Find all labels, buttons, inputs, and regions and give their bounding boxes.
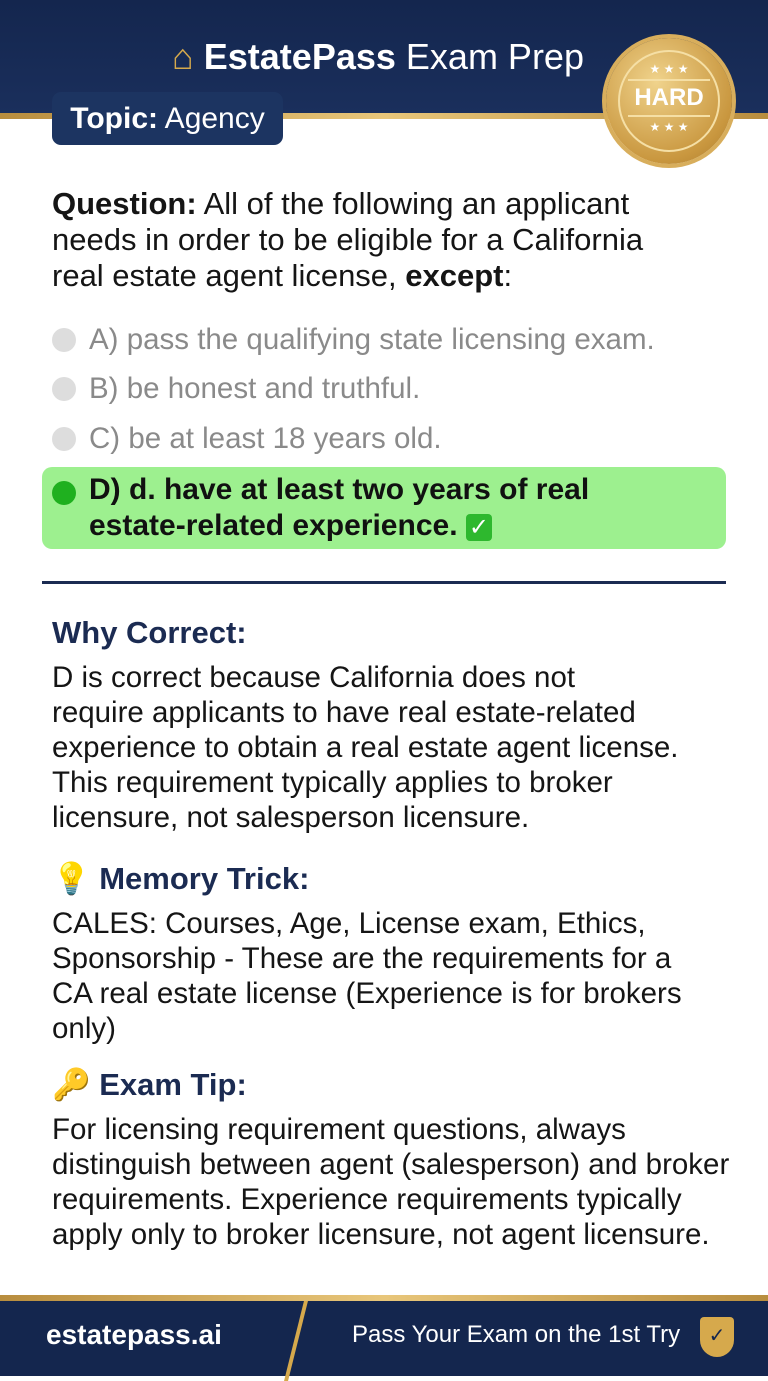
option B: B) be honest and truthful. xyxy=(89,372,420,405)
badge: HARD xyxy=(606,38,732,164)
why correct: Why Correct: xyxy=(52,615,247,650)
question: real estate agent license, except: xyxy=(52,258,512,293)
footer xyxy=(0,1295,768,1376)
memory trick: CALES: Courses, Age, License exam, Ethics, xyxy=(52,907,646,940)
why correct: licensure, not salesperson licensure. xyxy=(52,801,529,834)
footer: Pass Your Exam on the 1st Try xyxy=(352,1321,680,1348)
exam tip: apply only to broker licensure, not agent licensure. xyxy=(52,1218,710,1251)
title: ⌂ EstatePass Exam Prep xyxy=(172,36,584,77)
memory trick: Sponsorship - These are the requirements for a xyxy=(52,942,671,975)
exam tip: 🔑 Exam Tip: xyxy=(52,1067,247,1102)
memory trick: 💡 Memory Trick: xyxy=(52,861,309,896)
footer: estatepass.ai xyxy=(46,1319,222,1350)
option D correct: estate-related experience. ✓ xyxy=(89,509,489,542)
memory trick: only) xyxy=(52,1012,116,1045)
exam tip xyxy=(52,1067,729,1251)
header band xyxy=(0,0,768,113)
memory trick xyxy=(52,861,682,1045)
question: Question: All of the following an applicant xyxy=(52,186,629,221)
why correct: experience to obtain a real estate agent license. xyxy=(52,731,678,764)
why correct xyxy=(52,615,678,834)
why correct: This requirement typically applies to broker xyxy=(52,766,613,799)
option D correct xyxy=(42,467,726,549)
option C: C) be at least 18 years old. xyxy=(89,422,442,455)
memory trick: CA real estate license (Experience is for brokers xyxy=(52,977,682,1010)
badge: HARD: ★ ★ ★ xyxy=(650,62,688,76)
topic tag: Topic: Agency xyxy=(70,102,265,135)
badge: HARD: HARD xyxy=(634,84,704,111)
question: needs in order to be eligible for a California xyxy=(52,222,643,257)
question xyxy=(52,186,644,293)
footer: ✓ xyxy=(709,1325,725,1347)
badge: HARD: ★ ★ ★ xyxy=(650,120,688,134)
topic tag xyxy=(52,92,283,145)
option D correct: D) d. have at least two years of real xyxy=(89,473,589,506)
exam tip: distinguish between agent (salesperson) and broker xyxy=(52,1148,729,1181)
option A: A) pass the qualifying state licensing exam. xyxy=(89,323,655,356)
exam tip: requirements. Experience requirements typically xyxy=(52,1183,682,1216)
exam tip: For licensing requirement questions, always xyxy=(52,1113,626,1146)
why correct: require applicants to have real estate-related xyxy=(52,696,636,729)
why correct: D is correct because California does not xyxy=(52,661,575,694)
